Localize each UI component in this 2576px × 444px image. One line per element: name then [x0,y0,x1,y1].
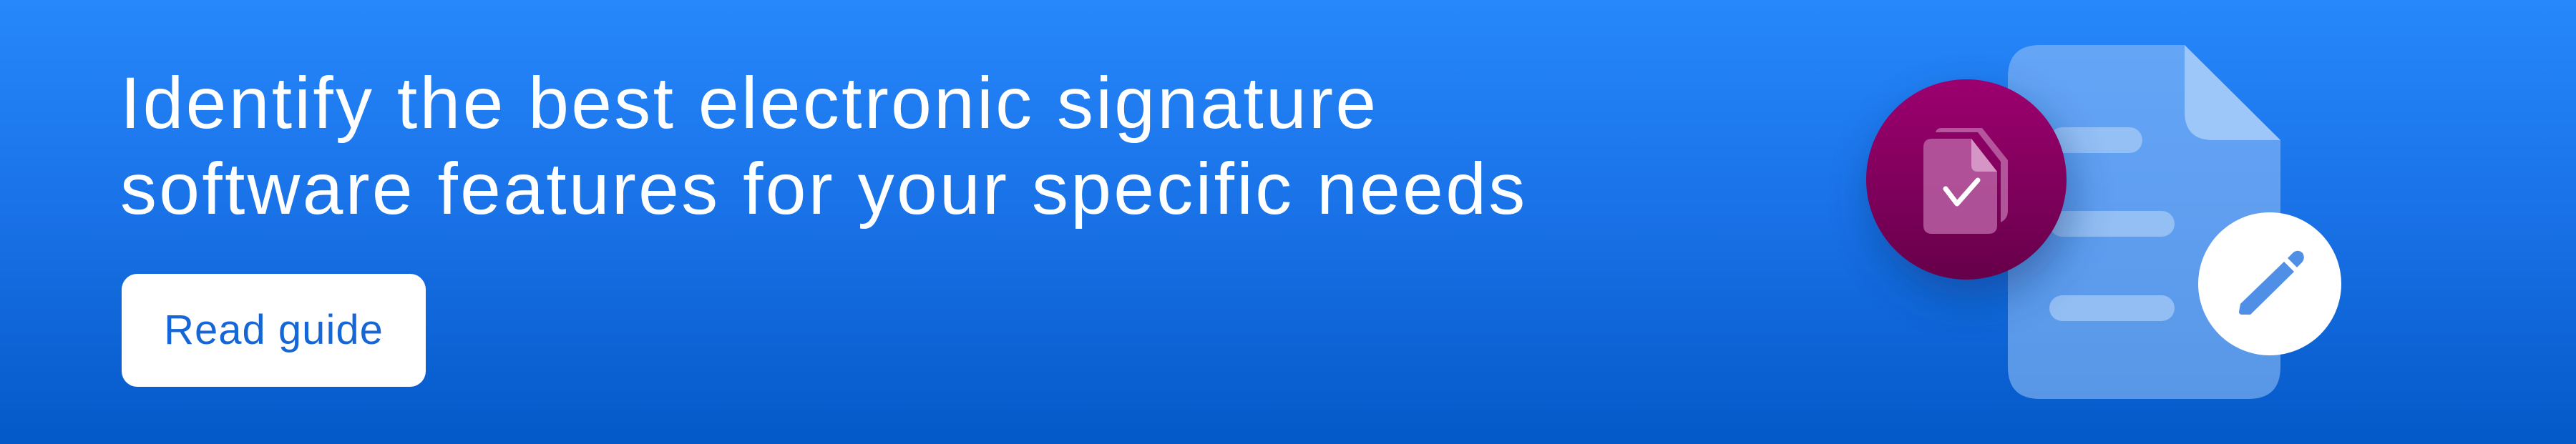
icon: white circle with pencil [2198,212,2341,355]
button: Read guide [122,274,426,387]
button: Read guide: Read guide [164,307,384,353]
title [120,62,1528,230]
document [2008,45,2280,399]
icon: purple circle with documents [1866,79,2072,297]
title: software features for your specific needs [120,148,1528,230]
title: Identify the best electronic signature [120,62,1378,144]
